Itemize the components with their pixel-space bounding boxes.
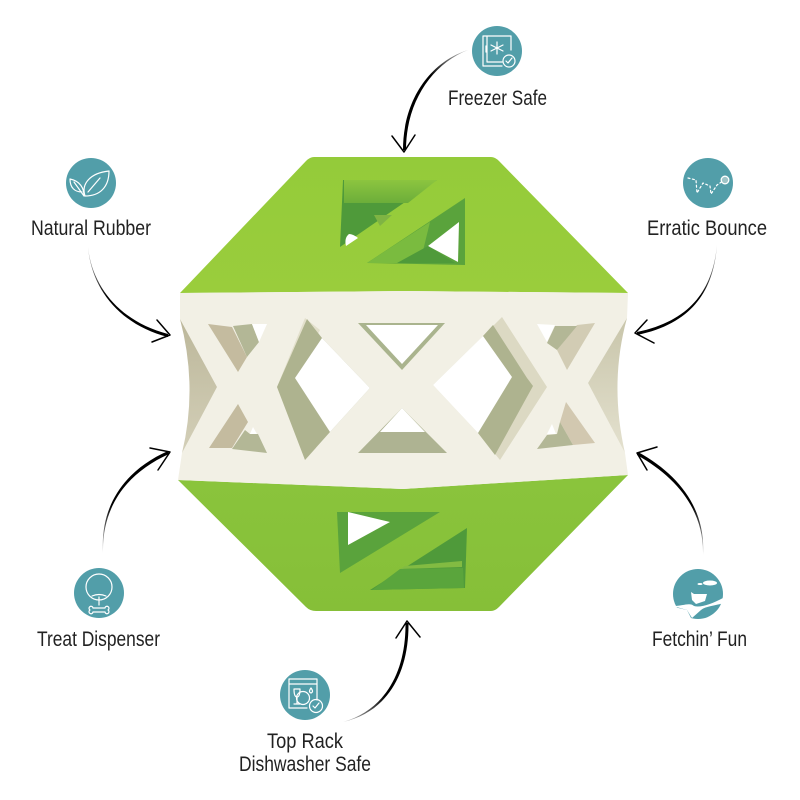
right lower triangle opening bbox=[560, 402, 595, 445]
arrow: fetchin fun bbox=[637, 447, 703, 555]
arrow: dishwasher safe bbox=[343, 621, 420, 722]
label bbox=[239, 730, 371, 776]
icon: hand throwing ball bbox=[670, 569, 724, 622]
icon: ball and bone bbox=[74, 568, 124, 618]
centre top triangle opening bbox=[358, 323, 445, 370]
centre bottom triangle opening bbox=[358, 408, 447, 453]
feature: treat dispenser bbox=[37, 568, 160, 651]
right diamond opening bbox=[433, 317, 547, 460]
label: Dishwasher Safe bbox=[239, 753, 371, 776]
icon: dishwasher bbox=[280, 670, 330, 720]
feature: fetchin fun bbox=[652, 569, 747, 651]
white centre band bbox=[178, 291, 628, 489]
green bottom cap bbox=[178, 475, 628, 611]
icon: leaf bbox=[66, 158, 116, 208]
label: Fetchin’ Fun bbox=[652, 628, 747, 651]
product: rubber ball toy bbox=[178, 157, 628, 611]
icon: freezer bbox=[472, 26, 522, 76]
right upper triangle opening bbox=[557, 323, 595, 370]
bottom window bbox=[337, 512, 467, 590]
feature: top rack dishwasher safe bbox=[239, 670, 371, 776]
label: Treat Dispenser bbox=[37, 628, 160, 651]
label: Natural Rubber bbox=[31, 217, 151, 240]
feature: erratic bounce bbox=[647, 158, 767, 240]
arrow: natural rubber bbox=[88, 247, 170, 342]
right side wedge bbox=[588, 318, 627, 453]
top window bbox=[340, 180, 465, 265]
label: Top Rack bbox=[267, 730, 343, 753]
arrow: freezer safe bbox=[392, 50, 468, 152]
feature: freezer safe bbox=[448, 26, 547, 110]
icon: bouncing ball bbox=[683, 158, 733, 208]
left upper triangle opening bbox=[208, 324, 247, 372]
left lower triangle opening bbox=[209, 404, 248, 448]
arrow: erratic bounce bbox=[635, 245, 717, 343]
left side wedge bbox=[180, 319, 217, 453]
label: Erratic Bounce bbox=[647, 217, 767, 240]
green top cap bbox=[180, 157, 628, 293]
label: Freezer Safe bbox=[448, 87, 547, 110]
arrow: treat dispenser bbox=[103, 448, 170, 553]
feature: natural rubber bbox=[31, 158, 151, 240]
left diamond opening bbox=[277, 318, 320, 460]
